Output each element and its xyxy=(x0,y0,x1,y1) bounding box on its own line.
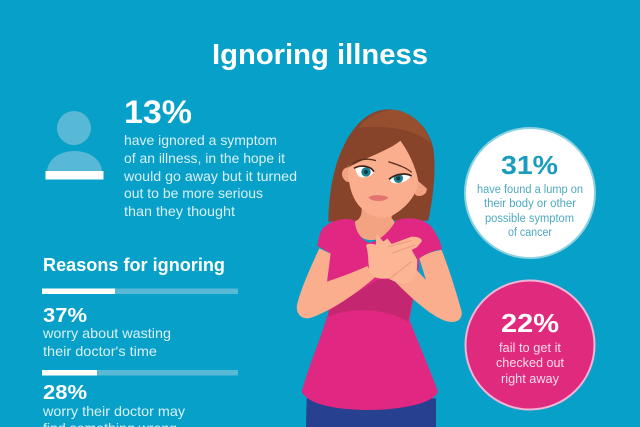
arm: right xyxy=(395,250,462,322)
stat: 28%: 28% xyxy=(43,382,87,404)
stat: 37%: their doctor's time xyxy=(43,343,157,359)
stat: 28% xyxy=(42,382,185,427)
eyelids and brows xyxy=(354,166,412,179)
mouth xyxy=(368,195,388,201)
circle: 31%: have found a lump on xyxy=(477,184,583,196)
stat: 37%: worry about wasting xyxy=(42,325,171,341)
shirt shadow xyxy=(329,278,415,322)
circle: 22%: fail to get it xyxy=(499,340,561,355)
circle: 22%: right away xyxy=(501,371,559,386)
neck xyxy=(354,203,395,240)
hair top highlight xyxy=(359,110,431,143)
shirt xyxy=(302,218,442,410)
circle: 31%: their body or other xyxy=(484,198,576,210)
circle: 31%: 31% xyxy=(501,150,558,180)
circle: 22%: 22% xyxy=(501,308,559,338)
ears xyxy=(342,167,427,196)
arm: left xyxy=(297,248,375,318)
stat: 13% ignored a symptom xyxy=(123,94,297,219)
hair back xyxy=(328,109,435,222)
stat: 13% ignored a symptom: than they thought xyxy=(124,203,235,219)
title: Ignoring illness xyxy=(212,39,428,71)
circle: 22%: checked out xyxy=(496,355,564,370)
stat: 13% ignored a symptom: of an illness, in the hope it xyxy=(124,150,285,166)
circle: 22% xyxy=(466,280,594,410)
bar: 28% xyxy=(42,370,238,376)
circle: 31%: possible symptom xyxy=(485,213,574,225)
stat: 37% xyxy=(42,305,171,359)
face xyxy=(348,140,418,218)
bar: 37% xyxy=(42,288,238,294)
heading: reasons for ignoring: Reasons for ignoring xyxy=(43,254,225,275)
stat: 13% ignored a symptom: would go away but it turned xyxy=(123,168,297,184)
stat: 37%: 37% xyxy=(43,305,87,327)
stat: 13% ignored a symptom: have ignored a symptom xyxy=(124,132,277,148)
circle: 31% xyxy=(465,128,595,258)
stat: 28%: worry their doctor may xyxy=(42,403,185,419)
icon: person xyxy=(46,111,104,180)
eyes xyxy=(355,166,374,178)
stat: 13% ignored a symptom: 13% xyxy=(124,94,192,130)
illustration: worried woman xyxy=(297,109,462,427)
hands xyxy=(366,234,422,283)
hair side locks xyxy=(348,132,426,185)
jeans xyxy=(306,398,436,427)
circle: 31%: of cancer xyxy=(508,227,552,239)
stat: 13% ignored a symptom: out to be more serious xyxy=(124,185,263,201)
